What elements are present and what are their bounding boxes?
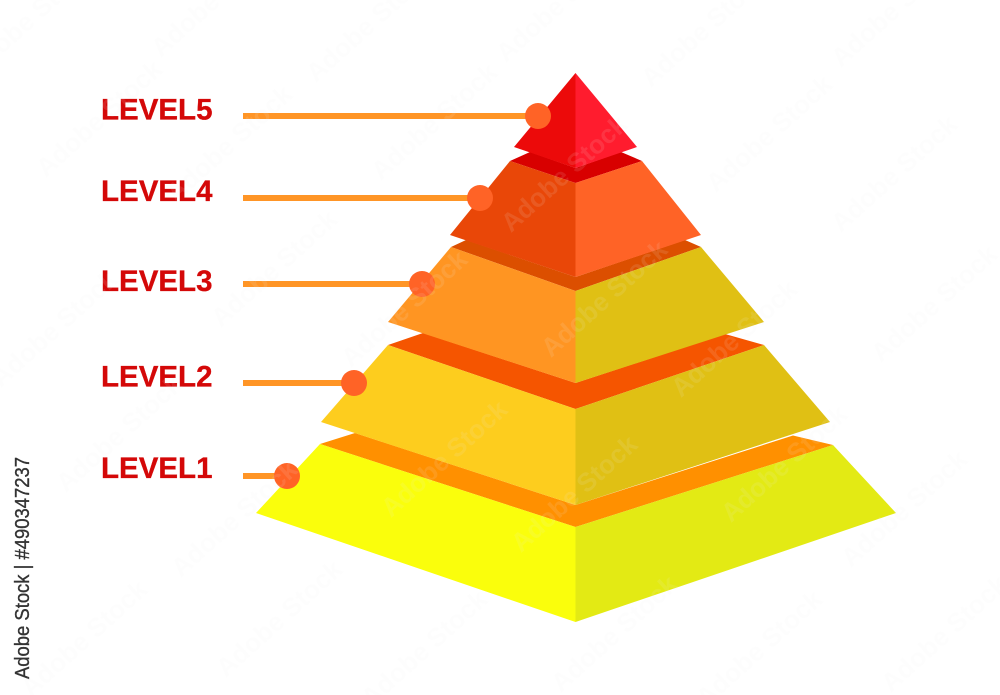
pyramid level 4 — [450, 152, 701, 277]
stock image id side text: Adobe Stock | #490347237 — [12, 457, 34, 679]
connector level 2 — [243, 370, 367, 396]
watermark pattern: Adobe Stock — [30, 54, 168, 183]
connector level 3 — [243, 271, 435, 297]
pyramid level 3 — [388, 240, 764, 383]
label level 5: LEVEL5 — [101, 94, 212, 126]
pyramid level 5: apex — [514, 73, 637, 168]
watermark pattern: Adobe Stock — [715, 399, 853, 528]
watermark pattern: Adobe Stock — [160, 79, 298, 208]
pyramid — [256, 73, 896, 622]
connector level 1 — [243, 463, 300, 489]
watermark pattern: Adobe Stock — [375, 394, 513, 523]
watermark pattern: Adobe Stock — [835, 444, 973, 573]
connector level 5 — [243, 103, 551, 129]
watermark pattern: Adobe Stock — [700, 69, 838, 198]
label level 1: LEVEL1 — [101, 452, 212, 485]
watermark pattern: Adobe Stock — [205, 204, 343, 333]
watermark pattern: Adobe Stock — [505, 429, 643, 558]
watermark pattern: Adobe Stock — [335, 244, 473, 373]
watermark pattern: Adobe Stock — [545, 569, 683, 695]
watermark pattern: Adobe Stock — [495, 109, 633, 238]
label level 4: LEVEL4 — [101, 175, 213, 208]
pyramid level 2 — [321, 333, 830, 505]
watermark pattern: Adobe Stock — [210, 554, 348, 683]
connector level 4 — [243, 185, 493, 211]
watermark pattern: Adobe Stock — [865, 239, 1000, 368]
watermark pattern: Adobe Stock — [535, 234, 673, 363]
label level 3: LEVEL3 — [101, 265, 212, 298]
watermark pattern: Adobe Stock — [825, 109, 963, 238]
pyramid level 1: base — [256, 433, 896, 622]
watermark pattern: Adobe Stock — [365, 57, 503, 186]
watermark pattern: Adobe Stock — [665, 274, 803, 403]
watermark pattern: Adobe Stock — [165, 454, 303, 583]
watermark pattern: Adobe Stock — [50, 369, 188, 498]
label level 2: LEVEL2 — [101, 360, 212, 394]
